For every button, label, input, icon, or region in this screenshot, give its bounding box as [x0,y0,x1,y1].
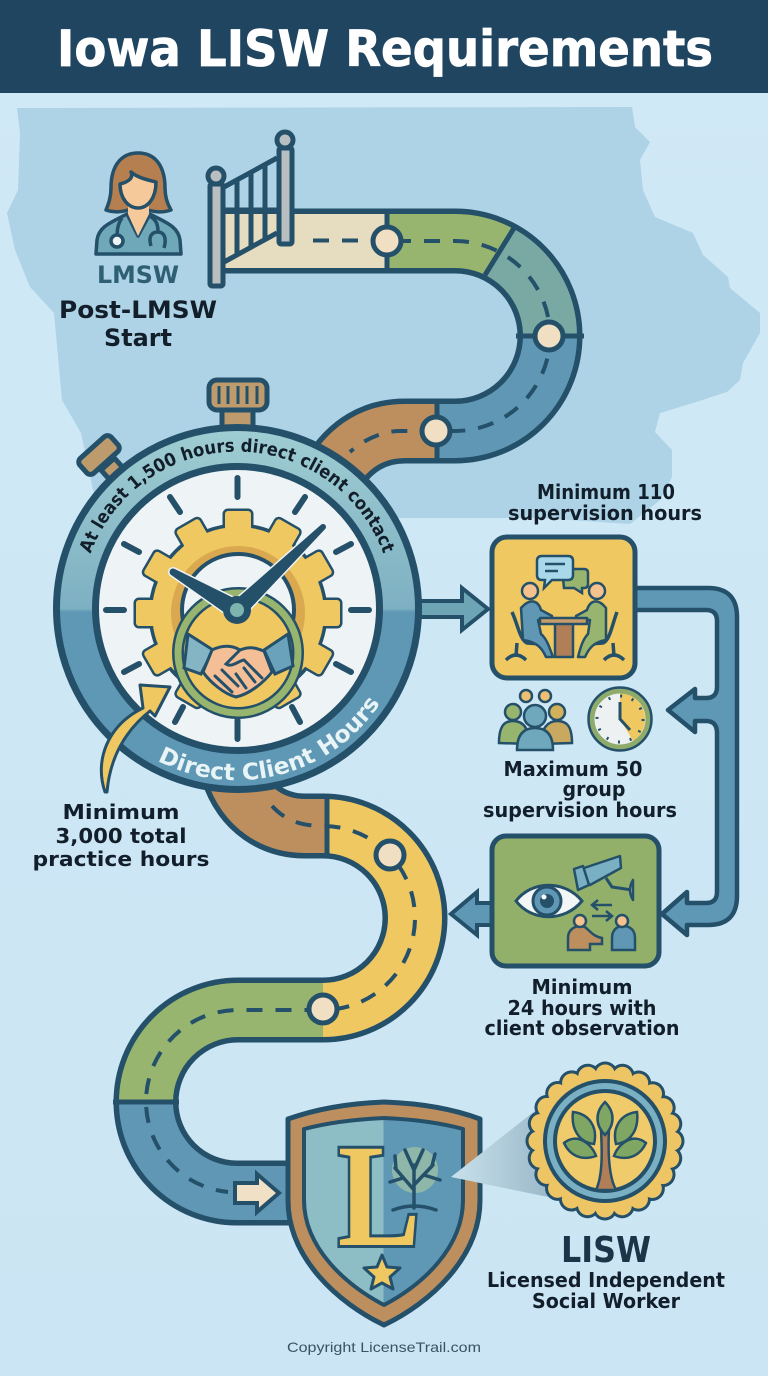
stopwatch [53,378,422,793]
lower winding road [113,770,415,1193]
spotlight cone from shield to badge [451,1110,548,1197]
icon: exchange arrows [592,900,612,921]
panel: client observation [492,836,659,966]
label: maximum 50 group supervision hours: Maximum 50 [504,757,642,781]
icon: LMSW clinician [96,153,181,254]
stopwatch outer ring [56,428,418,790]
arrow: observation box to lower road [451,892,494,935]
icon: seedling tree [564,1102,646,1190]
label: licensed independent social worker [487,1268,725,1313]
label: licensed independent social worker: Licensed Independent [487,1268,725,1292]
title banner [0,0,768,93]
label: minimum 110 supervision hours: Minimum 110 [537,480,675,504]
road waypoint markers (lower) [309,841,404,1023]
label: LISW: LISW [561,1230,651,1271]
curved text: at least 1,500 hours: At least 1,500 hours direct client contact [80,438,394,554]
label: minimum 3,000 total practice hours: Minimum [62,800,180,824]
icon: meeting at table [506,583,624,660]
label: minimum 24 hours with client observation [484,975,680,1040]
road waypoint markers (upper) [373,227,563,445]
label: maximum 50 group supervision hours: group [562,777,626,801]
label: minimum 110 supervision hours: supervision hours [508,501,702,525]
stopwatch side button [77,434,125,482]
label: minimum 110 supervision hours [508,480,702,525]
label: maximum 50 group supervision hours: supervision hours [483,798,677,822]
icon: wall clock [588,688,652,750]
Iowa state map silhouette [7,107,760,524]
label: Post-LMSW Start [59,296,217,352]
label: minimum 24 hours with client observation: Minimum [532,975,632,999]
upper winding road [225,210,584,475]
label: minimum 3,000 total practice hours: practice hours [32,847,209,871]
clock tick marks [106,478,369,739]
gear [136,511,340,715]
icon: eye [516,885,582,917]
label: maximum 50 group supervision hours [483,757,677,822]
icon: chat bubbles [537,556,588,593]
stopwatch face [96,466,380,750]
label: minimum 24 hours with client observation: 24 hours with [508,996,656,1020]
label: minimum 24 hours with client observation: client observation [484,1016,680,1040]
connector arrow: stopwatch to supervision box [420,588,488,630]
clock hands [173,527,323,624]
title banner: Iowa LISW Requirements [57,20,713,78]
letter L: L [338,1115,420,1277]
curved text: direct client hours: Direct Client Hours [159,698,378,780]
icon: gate at start of road [208,132,293,286]
stopwatch crown [209,380,267,428]
yellow arrow: total hours into clock [101,685,170,792]
icon: clinician and client [568,915,635,950]
label: LMSW: LMSW [97,261,179,289]
LISW badge [537,1073,673,1209]
icon: tree [390,1147,440,1210]
supervision flow connector [630,588,737,935]
icon: supervision group [499,690,572,750]
shield emblem [288,1102,480,1325]
copyright: Copyright LicenseTrail.com [287,1339,481,1355]
icon: star [364,1255,400,1289]
label: minimum 3,000 total practice hours: 3,000 total [56,824,186,848]
label: Post-LMSW Start: Post-LMSW [59,296,217,324]
panel: individual supervision [492,537,635,678]
label: licensed independent social worker: Social Worker [532,1289,680,1313]
label: minimum 3,000 total practice hours [32,800,209,871]
arrow on road into shield [235,1174,279,1212]
handshake medallion [178,593,298,713]
label: Post-LMSW Start: Start [104,324,172,352]
icon: security camera [574,856,633,900]
